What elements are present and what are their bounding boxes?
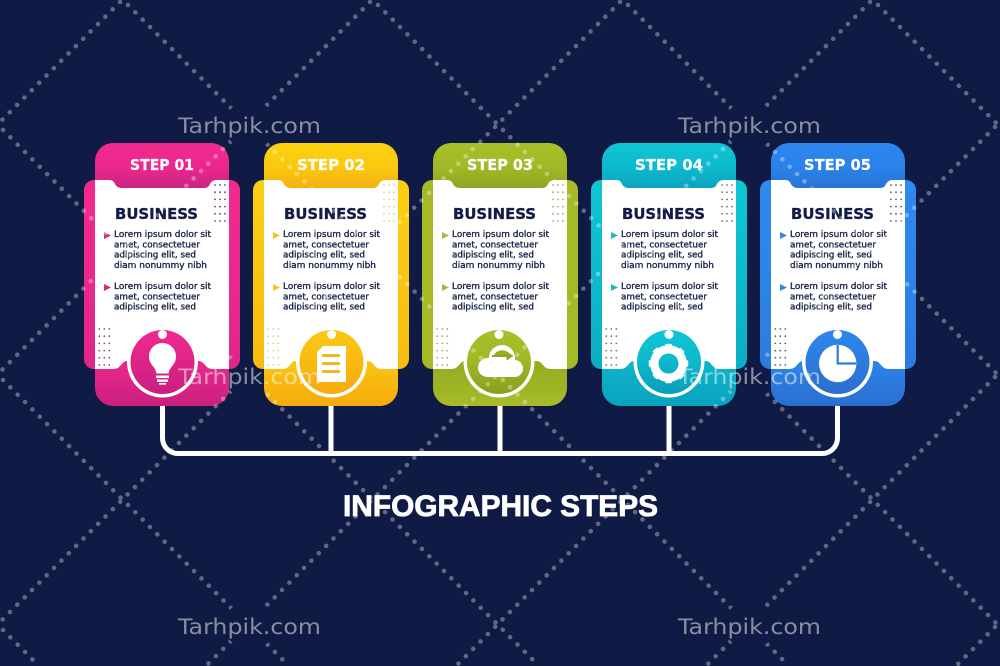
panel: step 05 <box>760 143 916 406</box>
dot grid top right <box>890 184 902 222</box>
icon badge <box>637 330 701 394</box>
icon badge <box>300 330 364 394</box>
text block 2 <box>283 281 380 313</box>
header tab: step 04 <box>602 143 736 195</box>
text block 2: adipiscing elit, sed <box>452 302 534 313</box>
dot grid top right <box>552 184 564 222</box>
dot grid bottom left <box>98 328 110 366</box>
text block 2: adipiscing elit, sed <box>790 302 872 313</box>
text block 1: adipiscing elit, sed <box>790 250 872 261</box>
icon badge ring <box>127 326 198 398</box>
icon: document <box>317 346 346 382</box>
connector line linking the steps <box>162 400 838 454</box>
icon badge ring <box>296 326 367 398</box>
dot grid top right <box>214 184 226 222</box>
bullet <box>442 284 449 291</box>
watermark texts: Tarhpik.com <box>177 365 321 389</box>
icon badge <box>130 330 194 394</box>
text block 1: Lorem ipsum dolor sit <box>621 229 718 240</box>
white content card: step 04 <box>602 180 736 369</box>
heading: business: BUSINESS <box>115 205 198 223</box>
icon: pie chart <box>819 345 856 382</box>
dot grid bottom left <box>605 328 617 366</box>
text block 2 <box>114 281 211 313</box>
text block 1: adipiscing elit, sed <box>621 250 703 261</box>
icon badge <box>467 330 531 394</box>
bullet <box>273 284 280 291</box>
text block 2: Lorem ipsum dolor sit <box>621 281 718 292</box>
badge hole <box>158 330 167 339</box>
watermark texts <box>177 114 821 639</box>
text block 2: amet, consectetuer <box>283 291 369 302</box>
label: step 02: STEP 02 <box>297 156 365 174</box>
side strips: step 04 <box>591 180 747 369</box>
header tab: step 05 <box>771 143 905 195</box>
text block 1: adipiscing elit, sed <box>283 250 365 261</box>
text block 2: adipiscing elit, sed <box>283 302 365 313</box>
panel: step 04 <box>591 143 747 406</box>
white content card: step 03 <box>433 180 567 369</box>
text block 2: Lorem ipsum dolor sit <box>283 281 380 292</box>
footer tab: step 04 <box>602 355 736 406</box>
text block 1: diam nonummy nibh <box>114 260 207 271</box>
heading: business: BUSINESS <box>453 205 536 223</box>
dot grid bottom left <box>436 328 448 366</box>
side strips: step 05 <box>760 180 916 369</box>
footer tab: step 02 <box>264 355 398 406</box>
text block 1 <box>790 229 887 271</box>
watermark texts: Tarhpik.com <box>677 365 821 389</box>
text block 2: adipiscing elit, sed <box>621 302 703 313</box>
text block 1: adipiscing elit, sed <box>452 250 534 261</box>
panel: step 01 <box>84 143 240 406</box>
heading: business: BUSINESS <box>791 205 874 223</box>
icon: cloud with arrow <box>478 345 523 377</box>
text block 2 <box>621 281 718 313</box>
text block 1: diam nonummy nibh <box>790 260 883 271</box>
dot grid top right <box>383 184 395 222</box>
panel: step 02 <box>253 143 409 406</box>
icon: gear <box>650 346 686 382</box>
text block 1: amet, consectetuer <box>283 239 369 250</box>
text block 1 <box>621 229 718 271</box>
icon: light bulb <box>149 343 176 385</box>
header tab: step 02 <box>264 143 398 195</box>
bullet <box>611 284 618 291</box>
text block 2: amet, consectetuer <box>114 291 200 302</box>
panel: step 03 <box>422 143 578 406</box>
text block 2: Lorem ipsum dolor sit <box>790 281 887 292</box>
icon badge ring <box>802 326 873 398</box>
icon badge ring <box>634 326 704 398</box>
icon badge ring <box>464 326 534 398</box>
text block 2: amet, consectetuer <box>452 291 538 302</box>
bullet <box>780 232 787 239</box>
text block 2 <box>452 281 549 313</box>
text block 1: Lorem ipsum dolor sit <box>790 229 887 240</box>
white content card: step 02 <box>264 180 398 369</box>
footer tab: step 03 <box>433 355 567 406</box>
text block 1 <box>283 229 380 271</box>
text block 2: Lorem ipsum dolor sit <box>452 281 549 292</box>
text block 1: diam nonummy nibh <box>452 260 545 271</box>
watermark texts: Tarhpik.com <box>677 615 821 639</box>
footer tab: step 01 <box>95 355 229 406</box>
text block 1: adipiscing elit, sed <box>114 250 196 261</box>
badge hole <box>833 330 842 339</box>
text block 1: amet, consectetuer <box>790 239 876 250</box>
bullet <box>273 232 280 239</box>
heading: business: BUSINESS <box>284 205 367 223</box>
text block 1: Lorem ipsum dolor sit <box>283 229 380 240</box>
heading: business: BUSINESS <box>622 205 705 223</box>
header tab: step 01 <box>95 143 229 195</box>
bullet <box>442 232 449 239</box>
bullet <box>611 232 618 239</box>
label: step 04: STEP 04 <box>635 156 703 174</box>
white content card: step 05 <box>771 180 905 369</box>
badge hole <box>494 330 504 339</box>
header tab: step 03 <box>433 143 567 195</box>
side strips: step 03 <box>422 180 578 369</box>
text block 1: amet, consectetuer <box>114 239 200 250</box>
text block 1: amet, consectetuer <box>452 239 538 250</box>
text block 2: amet, consectetuer <box>621 291 707 302</box>
text block 2 <box>790 281 887 313</box>
label: step 05: STEP 05 <box>804 156 871 174</box>
white content card: step 01 <box>95 180 229 369</box>
watermark texts: Tarhpik.com <box>177 114 321 138</box>
footer tab: step 05 <box>771 355 905 406</box>
text block 1: diam nonummy nibh <box>621 260 714 271</box>
text block 2: adipiscing elit, sed <box>114 302 196 313</box>
watermark texts: Tarhpik.com <box>177 615 321 639</box>
side strips: step 02 <box>253 180 409 369</box>
text block 2: Lorem ipsum dolor sit <box>114 281 211 292</box>
text block 1: Lorem ipsum dolor sit <box>452 229 549 240</box>
dot grid top right <box>721 184 733 222</box>
label: step 03: STEP 03 <box>467 156 533 174</box>
text block 1 <box>452 229 549 271</box>
dot grid bottom left <box>774 328 786 366</box>
bullet <box>104 232 111 239</box>
text block 1 <box>114 229 211 271</box>
dot grid bottom left <box>267 328 279 366</box>
badge hole <box>327 330 336 339</box>
bullet <box>780 284 787 291</box>
label: step 01: STEP 01 <box>130 156 194 174</box>
text block 1: amet, consectetuer <box>621 239 707 250</box>
icon badge <box>806 330 870 394</box>
text block 2: amet, consectetuer <box>790 291 876 302</box>
side strips: step 01 <box>84 180 240 369</box>
bullet <box>104 284 111 291</box>
text block 1: Lorem ipsum dolor sit <box>114 229 211 240</box>
badge hole <box>664 330 674 339</box>
watermark texts: Tarhpik.com <box>677 114 821 138</box>
text block 1: diam nonummy nibh <box>283 260 376 271</box>
title: INFOGRAPHIC STEPS <box>343 490 658 523</box>
